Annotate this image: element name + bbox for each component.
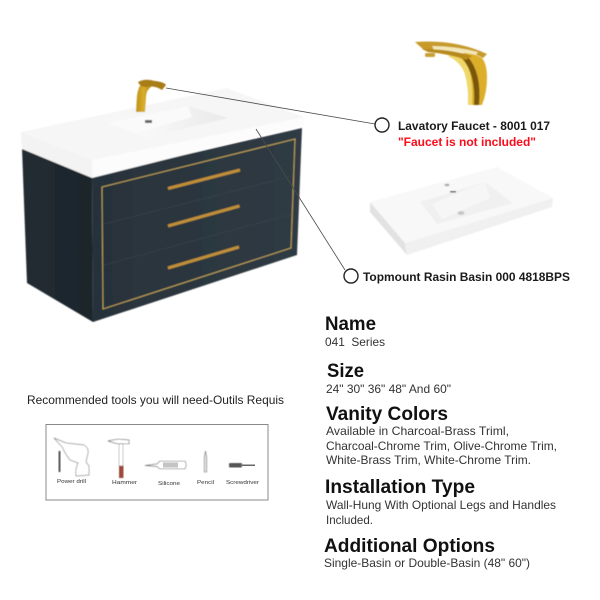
vanity cabinet illustration	[21, 80, 304, 322]
text: installation: Included.	[326, 513, 373, 527]
cabinet left side	[22, 148, 93, 322]
text: colors list: Available in Charcoal-Brass Triml,	[326, 424, 509, 438]
spec: name	[325, 314, 385, 349]
text: installation	[326, 498, 556, 527]
faucet on vanity	[136, 80, 166, 112]
heading: installation type: Installation Type	[325, 477, 475, 498]
text: colors list: Charcoal-Chrome Trim, Olive-Chrome Trim,	[326, 439, 557, 453]
label: power drill: Power drill	[57, 479, 86, 485]
countertop	[21, 88, 304, 160]
panel: recommended tools	[46, 424, 268, 500]
spec: size	[326, 361, 451, 396]
label: silicone: Silicone	[158, 481, 180, 487]
tools heading: Recommended tools you will need-Outils Requis	[27, 393, 284, 407]
spec: additional options	[324, 536, 530, 570]
callout label: basin: Topmount Rasin Basin 000 4818BPS	[363, 270, 570, 284]
icon: power drill	[54, 438, 89, 485]
icon: pencil	[197, 451, 214, 486]
spec: installation type	[325, 477, 556, 527]
heading: vanity colors: Vanity Colors	[326, 404, 448, 425]
leader line: basin	[256, 129, 345, 270]
label: pencil: Pencil	[197, 480, 214, 486]
icon: silicone tube	[145, 461, 186, 487]
text: options: Single-Basin or Double-Basin (48" 60")	[324, 556, 530, 570]
text: colors list	[326, 424, 557, 467]
leader line: faucet	[166, 88, 375, 124]
countertop front edge	[92, 117, 304, 178]
spec: vanity colors	[326, 404, 557, 467]
drain	[145, 120, 152, 123]
callout note: faucet not included: "Faucet is not included"	[398, 135, 536, 149]
drawer seams	[104, 176, 293, 265]
callout label: faucet: Lavatory Faucet - 8001 017	[398, 119, 550, 133]
drawer handles	[168, 170, 240, 268]
label: hammer: Hammer	[112, 480, 137, 486]
heading: size: Size	[327, 361, 364, 382]
brass trim	[102, 139, 295, 309]
label: screwdriver: Screwdriver	[226, 480, 259, 486]
sink basin	[108, 106, 228, 138]
icon: basin product photo	[370, 167, 553, 255]
text: colors list: White-Brass Trim, White-Chrome Trim.	[326, 453, 531, 467]
cabinet front	[92, 128, 302, 322]
text: series: 041 Series	[325, 335, 385, 349]
countertop left edge	[21, 132, 92, 178]
heading: additional options: Additional Options	[324, 536, 495, 557]
text: installation: Wall-Hung With Optional Legs and Handles	[326, 498, 556, 512]
icon: hammer	[108, 439, 137, 486]
callout marker: faucet	[375, 118, 389, 132]
callout marker: basin	[344, 269, 358, 283]
icon: faucet product photo	[415, 42, 487, 105]
icon: screwdriver	[226, 463, 259, 486]
heading: name: Name	[325, 314, 376, 335]
text: sizes: 24" 30" 36" 48" And 60"	[326, 382, 451, 396]
